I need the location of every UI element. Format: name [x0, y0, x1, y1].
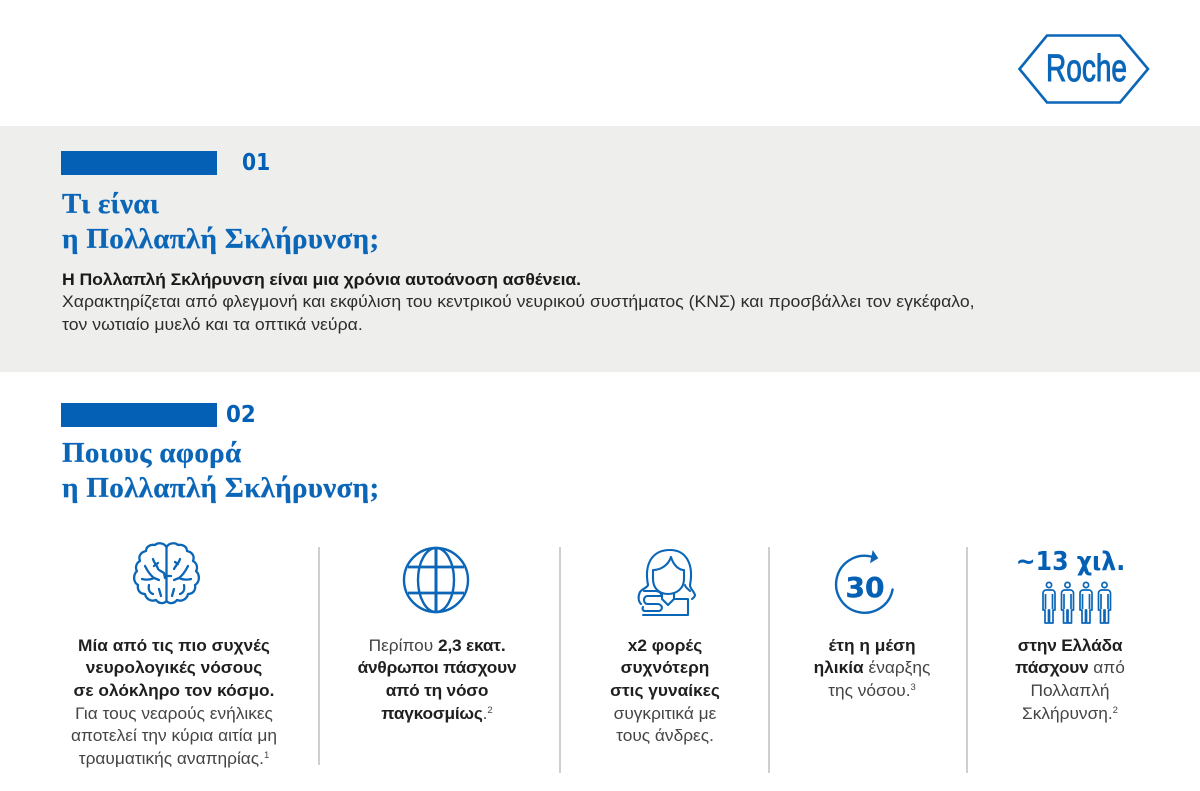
- heading: what is MS: Τι είναι: [62, 188, 159, 220]
- text: column 5: στην Ελλάδα: [1018, 636, 1122, 654]
- icon: 30 years with circular arrow: 30: [846, 571, 884, 604]
- text: column 2: παγκοσμίως.2: [381, 705, 493, 723]
- icon: woman: [638, 549, 696, 616]
- text: column 5: Πολλαπλή: [1030, 682, 1109, 700]
- text: column 2: [358, 636, 516, 723]
- section 01 number: 01: [242, 150, 270, 176]
- text: column 4: έτη η μέση: [828, 636, 916, 654]
- text: column 4: [814, 636, 930, 700]
- heading: who is affected: Ποιους αφορά: [62, 437, 242, 469]
- text: column 1: τραυματικής αναπηρίας.1: [79, 750, 269, 768]
- stat: about 13 thousand: ~13 χιλ.: [1016, 547, 1125, 577]
- section 02 bar: [61, 403, 217, 427]
- text: column 5: πάσχουν από: [1015, 659, 1125, 677]
- text: definition: τον νωτιαίο μυελό και τα οπτικά νεύρα.: [62, 316, 363, 334]
- panel: section 01: [0, 126, 1200, 372]
- text: column 4: ηλικία έναρξης: [814, 659, 930, 677]
- heading: who is affected: [62, 437, 379, 504]
- separator: [318, 547, 320, 765]
- text: column 3: [610, 636, 720, 745]
- text: definition: [62, 270, 975, 334]
- heading: what is MS: η Πολλαπλή Σκλήρυνση;: [62, 223, 379, 255]
- text: column 3: συγκριτικά με: [614, 705, 716, 723]
- text: column 3: στις γυναίκες: [610, 682, 720, 700]
- text: column 3: συχνότερη: [621, 659, 709, 677]
- icon: 30 years with circular arrow: [834, 550, 894, 614]
- text: column 5: Σκλήρυνση.2: [1022, 705, 1118, 723]
- text: column 2: Περίπου 2,3 εκατ.: [369, 636, 505, 654]
- text: column 1: Μία από τις πιο συχνές: [78, 636, 270, 654]
- icon: globe: [402, 546, 470, 614]
- text: column 2: από τη νόσο: [386, 682, 488, 700]
- text: column 5: [1015, 636, 1125, 723]
- logo: Roche: Roche: [1046, 48, 1127, 90]
- separator: [966, 547, 968, 773]
- text: column 2: άνθρωποι πάσχουν: [358, 659, 516, 677]
- logo: Roche: [1018, 34, 1150, 104]
- icon: four people: [1042, 582, 1112, 624]
- heading: who is affected: η Πολλαπλή Σκλήρυνση;: [62, 472, 379, 504]
- text: column 1: σε ολόκληρο τον κόσμο.: [74, 682, 274, 700]
- text: column 1: αποτελεί την κύρια αιτία μη: [71, 727, 277, 745]
- text: column 1: Για τους νεαρούς ενήλικες: [75, 705, 273, 723]
- text: column 4: της νόσου.3: [828, 682, 916, 700]
- separator: [559, 547, 561, 773]
- text: column 3: x2 φορές: [628, 636, 702, 654]
- heading: what is MS: [62, 188, 379, 255]
- text: definition: Χαρακτηρίζεται από φλεγμονή και εκφύλιση του κεντρικού νευρικού συστήματος (ΚΝΣ) και προσβάλλει τον εγκέφαλο,: [62, 293, 975, 311]
- section 02 number: 02: [226, 402, 256, 428]
- section 01 bar: [61, 151, 217, 175]
- text: column 1: [71, 636, 277, 768]
- text: definition: Η Πολλαπλή Σκλήρυνση είναι μια χρόνια αυτοάνοση ασθένεια.: [62, 270, 581, 288]
- text: column 1: νευρολογικές νόσους: [86, 659, 262, 677]
- separator: [768, 547, 770, 773]
- text: column 3: τους άνδρες.: [616, 727, 714, 745]
- icon: brain: [132, 542, 200, 604]
